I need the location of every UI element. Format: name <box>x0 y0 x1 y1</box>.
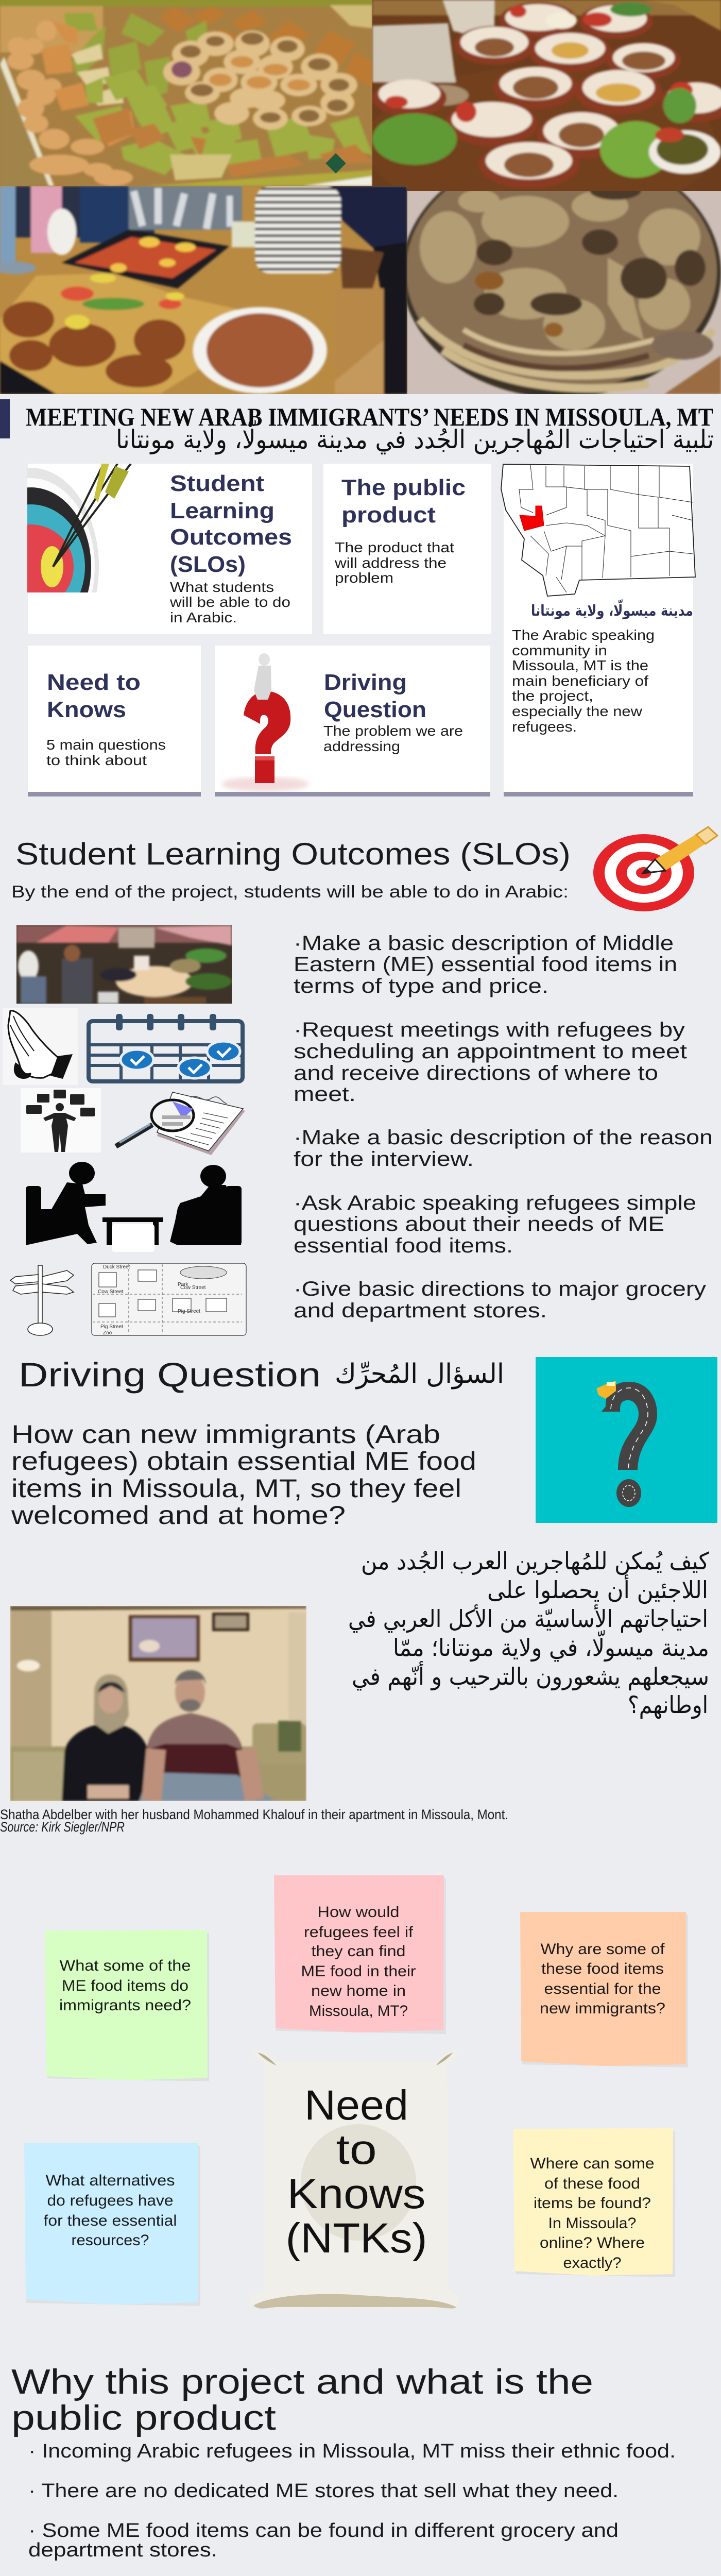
bullet list: department stores. <box>28 2539 217 2561</box>
chicken pieces <box>420 190 700 350</box>
bullet list: and receive directions of where to <box>294 1062 658 1084</box>
heading English: Driving Question <box>19 1355 321 1394</box>
description: to think about <box>46 752 147 768</box>
description: refugees. <box>512 719 577 735</box>
panel: public product <box>323 464 491 634</box>
heading: Why this project and what is the <box>11 2362 593 2401</box>
heading <box>11 2362 593 2437</box>
sticky note: green: ME food items do <box>62 1977 188 1994</box>
intro sentence: By the end of the project, students will be able to do in Arabic: <box>11 882 569 901</box>
driving question English: refugees) obtain essential ME food <box>11 1447 476 1476</box>
Arabic caption: مدينة ميسولّا، ولاية مونتانا <box>531 600 693 619</box>
photo: mezze bowls <box>372 0 721 191</box>
icon: praying hands <box>3 1008 78 1085</box>
sticky note: yellow: items be found? <box>534 2195 651 2212</box>
heading: Student <box>170 471 264 496</box>
sticky note: blue: resources? <box>71 2232 149 2249</box>
heading: (SLOs) <box>170 552 246 577</box>
description <box>512 627 655 735</box>
bullet list: ·Ask Arabic speaking refugees simple <box>294 1192 696 1214</box>
photo: Shatha Abdelber and Mohammed Khalouf <box>10 1606 306 1802</box>
photo: Middle Eastern market <box>16 925 232 1004</box>
bullet list: · Incoming Arabic refugees in Missoula, MT miss their ethnic food. <box>28 2441 676 2462</box>
sticky note: pink <box>274 1875 446 2034</box>
heading: public product <box>11 2398 276 2437</box>
driving question Arabic <box>348 1547 709 1719</box>
bullet list: ·Make a basic description of the reason <box>294 1126 713 1149</box>
sticky note: green: What some of the <box>60 1957 191 1974</box>
sticky note: orange: Why are some of <box>541 1941 665 1958</box>
icon: speaker with speech bubbles <box>21 1088 101 1153</box>
sticky note: pink: ME food in their <box>301 1963 416 1980</box>
photo caption: Shatha Abdelber with her husband Mohammed Khalouf in their apartment in Missoula, Mont. <box>0 1807 508 1822</box>
bullet list <box>28 2441 688 2576</box>
sticky note: orange <box>520 1912 688 2067</box>
photo: buffet table <box>0 186 407 394</box>
bullet list: and department stores. <box>294 1299 547 1322</box>
nests <box>163 30 357 130</box>
icon: thinker on red question mark <box>221 653 309 791</box>
sack: Need to Knows: Need <box>304 2082 408 2129</box>
photo collage: Arab food <box>0 0 721 398</box>
heading: Driving <box>324 670 407 695</box>
sticky note: yellow: online? Where <box>540 2234 645 2251</box>
header accent bar <box>0 399 10 438</box>
heading: Knows <box>47 697 126 722</box>
icon: hand-drawn town map: Cow Street <box>180 1285 206 1291</box>
heading: The public <box>341 475 466 500</box>
sticky note: pink: How would <box>317 1904 400 1921</box>
sticky note: yellow <box>513 2128 675 2277</box>
description: addressing <box>323 738 400 754</box>
bullet list <box>294 932 713 1322</box>
sticky note: green: immigrants need? <box>59 1997 191 2014</box>
sticky note: blue: What alternatives <box>45 2172 175 2189</box>
sack: Need to Knows: Knows <box>287 2171 425 2217</box>
description: main beneficiary of <box>512 673 648 689</box>
bullet list: for the interview. <box>294 1148 474 1171</box>
description: community in <box>512 642 607 658</box>
panel: Student Learning Outcomes <box>27 464 312 634</box>
sticky note: pink: refugees feel if <box>304 1924 414 1941</box>
sticky note: yellow: of these food <box>544 2175 640 2192</box>
sack: Need to Knows <box>249 2050 460 2309</box>
bullet list: · There are no dedicated ME stores that sell what they need. <box>28 2480 619 2502</box>
sticky note: orange: new immigrants? <box>540 2000 665 2017</box>
heading <box>170 471 292 577</box>
heading <box>47 670 141 722</box>
panel: Driving Question <box>215 646 490 796</box>
title <box>26 402 714 455</box>
icon: hand-drawn town map: Zoo <box>103 1330 112 1336</box>
description: What students <box>170 579 274 595</box>
photo caption: Source: Kirk Siegler/NPR <box>0 1819 125 1835</box>
description: The problem we are <box>323 723 463 739</box>
heading: Question <box>324 697 426 722</box>
sticky note: yellow: Where can some <box>530 2155 654 2172</box>
icon: bullseye with pencil <box>593 827 717 911</box>
sack: Need to Knows: to <box>336 2126 377 2173</box>
bullet list: ·Give basic directions to major grocery <box>294 1278 706 1300</box>
icon: calendar <box>88 1014 244 1081</box>
sticky note: orange: essential for the <box>544 1980 661 1997</box>
description: The product that <box>335 539 454 555</box>
driving question Arabic: اوطانهم؟ <box>628 1691 708 1719</box>
heading: Student Learning Outcomes (SLOs) <box>15 837 571 871</box>
icon: signpost <box>10 1265 74 1335</box>
sticky note: orange: these food items <box>541 1960 664 1977</box>
description: will address the <box>334 555 447 571</box>
heading: Learning <box>170 498 274 523</box>
bullet list: essential food items. <box>294 1234 513 1257</box>
sticky note: yellow: exactly? <box>563 2255 621 2272</box>
icon: two people in an interview <box>26 1162 242 1252</box>
section: Need to Knows <box>24 1875 688 2309</box>
description: 5 main questions <box>46 737 166 753</box>
photo caption <box>0 1807 508 1835</box>
description <box>46 737 166 768</box>
baklava slabs <box>41 21 135 147</box>
icon: hand-drawn town map: Pig Street <box>178 1309 200 1314</box>
icon: archery target <box>27 464 132 592</box>
section: Student Learning Outcomes <box>3 827 717 1336</box>
icon: magnifier over document <box>116 1092 245 1155</box>
description: will be able to do <box>169 594 290 610</box>
driving question English <box>11 1420 476 1530</box>
sticky note: pink: new home in <box>311 1982 406 1999</box>
driving question English: welcomed and at home? <box>11 1501 346 1530</box>
heading <box>324 670 426 722</box>
orange diamonds top right <box>160 6 372 88</box>
bullet list: · Some ME food items can be found in different grocery and <box>28 2520 619 2541</box>
photo: musakhan chicken platter <box>407 191 721 394</box>
description <box>323 723 463 754</box>
description: The Arabic speaking <box>512 627 655 643</box>
section: Why this project <box>11 2368 674 2561</box>
sticky note: blue <box>24 2143 200 2306</box>
description: the project, <box>512 688 593 704</box>
sticky note: blue: for these essential <box>43 2212 177 2229</box>
pistachio blocks lower <box>75 70 372 175</box>
icon: hand-drawn town map: Cow Street <box>98 1289 124 1295</box>
description: problem <box>335 570 393 586</box>
panel: Need to Knows <box>28 646 201 796</box>
green squares top middle <box>64 13 209 98</box>
heading: Outcomes <box>170 524 292 550</box>
bullet list: terms of type and price. <box>294 975 548 997</box>
sticky note: blue: do refugees have <box>47 2192 173 2209</box>
description: especially the new <box>512 703 643 719</box>
driving question English: items in Missoula, MT, so they feel <box>11 1474 461 1503</box>
map of Montana counties <box>501 464 695 596</box>
heading: product <box>341 502 436 528</box>
driving question Arabic: اللاجئين أن يحصلوا على <box>487 1574 708 1604</box>
sticky note: green <box>45 1930 209 2081</box>
Missoula county highlight <box>520 506 544 531</box>
sticky note: pink: they can find <box>311 1943 406 1960</box>
sticky note: yellow: In Missoula? <box>548 2215 637 2232</box>
rolls <box>7 21 133 186</box>
description: in Arabic. <box>170 609 237 625</box>
bullet list: meet. <box>294 1083 356 1106</box>
layered bread rims <box>420 319 713 388</box>
section: Driving Question <box>0 1355 717 1835</box>
icon: road question mark on teal <box>536 1357 717 1523</box>
sack: Need to Knows: (NTKs) <box>285 2215 427 2262</box>
panel: Missoula map <box>501 464 695 796</box>
bullet list: scheduling an appointment to meet <box>294 1040 687 1063</box>
bullet list: ·Request meetings with refugees by <box>294 1019 685 1041</box>
heading <box>341 475 466 528</box>
bullet list: ·Make a basic description of Middle <box>294 932 674 955</box>
description: Missoula, MT is the <box>512 657 648 673</box>
sticky note: pink: Missoula, MT? <box>309 2003 408 2020</box>
icon: hand-drawn town map <box>92 1263 246 1336</box>
driving question English: How can new immigrants (Arab <box>11 1420 440 1449</box>
bullet list: questions about their needs of ME <box>294 1213 664 1235</box>
description <box>169 579 290 625</box>
heading Arabic: السؤال المُحرِّك <box>335 1359 504 1389</box>
heading: Need to <box>47 670 141 695</box>
icon: hand-drawn town map: Duck Street <box>103 1264 130 1270</box>
photo: baklava tray <box>0 0 372 186</box>
description <box>334 539 454 586</box>
logo: pastry shop <box>325 153 346 174</box>
icon: hand-drawn town map: Park <box>178 1282 189 1287</box>
icon: hand-drawn town map: Pig Street <box>100 1324 123 1330</box>
bullet list: Eastern (ME) essential food items in <box>294 953 677 976</box>
